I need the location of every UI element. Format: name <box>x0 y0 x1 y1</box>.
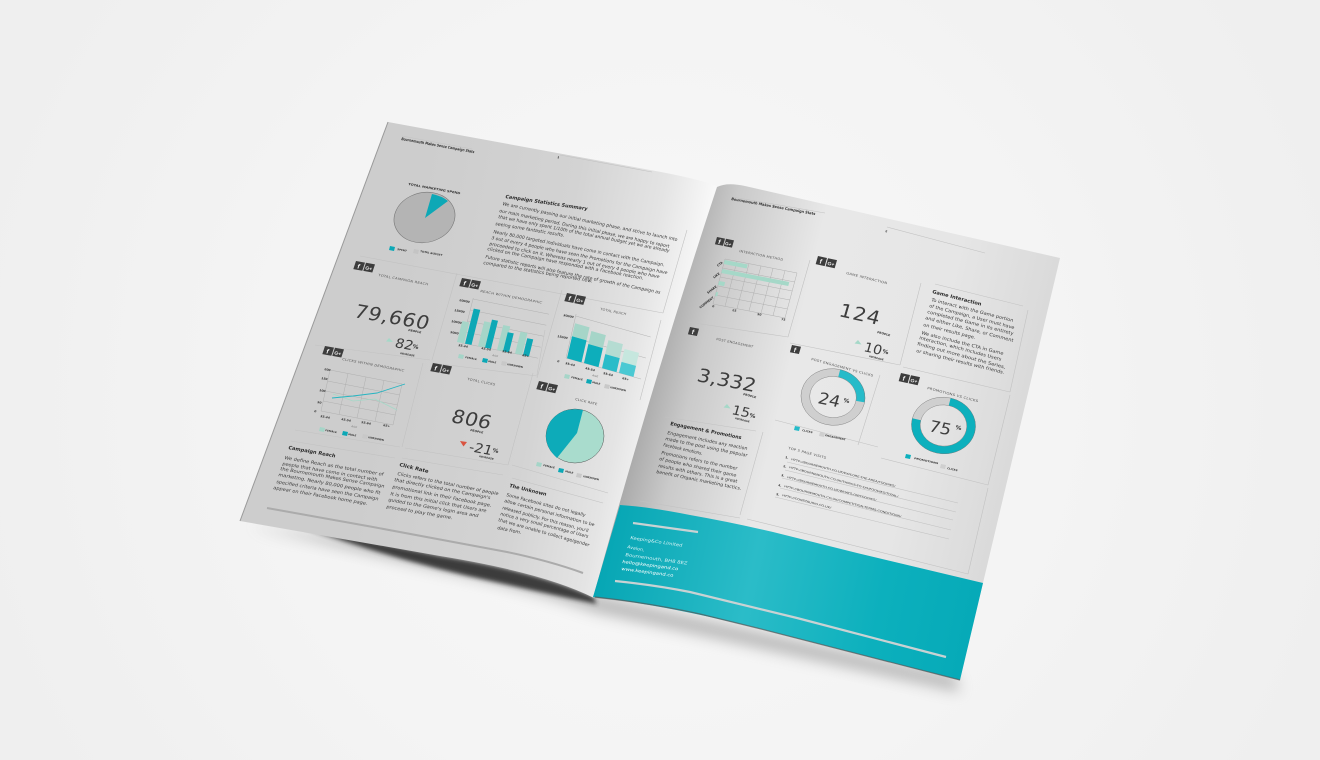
panel: reach within demographic: 45-54 <box>481 346 491 352</box>
text block: engagement and promotions: made to the post using the popular <box>664 436 748 459</box>
list: top 5 page visits: 1. <box>785 455 789 460</box>
list: top 5 page visits: HTTP://BOURNEMOUTH.CO.UK/WHATS-ON/FOODIES/ <box>787 475 877 502</box>
panel: clicks within demographic: 50 <box>317 400 322 405</box>
panel: total clicks: 806 <box>448 406 494 434</box>
panel: clicks within demographic: UNKNOWN <box>368 435 385 442</box>
page header left <box>401 136 652 172</box>
text block: campaign statistics summary: Nearly 80,000 targeted individuals have come in contact with the Campaign. <box>492 229 665 268</box>
text block: campaign reach: marketing. Nearly 80,000 people who fit <box>277 472 381 496</box>
panel: promotions vs clicks: CLICKS <box>947 466 958 472</box>
panel: total clicks <box>430 363 499 461</box>
page header right <box>731 196 985 253</box>
text block: the unknown: notice a very small percentage of Users <box>499 511 590 540</box>
teal footer band <box>593 505 983 680</box>
bar chart <box>457 297 549 358</box>
footer contact block: hello@keepingand.co <box>621 559 679 572</box>
panel: reach within demographic: 20000 <box>459 298 470 304</box>
right page <box>593 184 1060 680</box>
page header left: 1 <box>557 155 560 159</box>
panel: total clicks: -21 <box>467 440 495 459</box>
text block: engagement and promotions: benefit of Organic marketing tactics. <box>655 469 742 492</box>
footer rule right <box>615 581 946 657</box>
icon: social tags: G+ <box>910 378 918 385</box>
icon: social tags: f <box>462 281 467 288</box>
panel: post engagement: PEOPLE <box>743 392 757 399</box>
panel: game interaction <box>816 256 891 362</box>
panel: total campaign reach <box>351 261 432 358</box>
panel: total reach: 35-44 <box>565 361 575 367</box>
text block: click rate: guided to the Game's login area and <box>387 497 479 519</box>
panel: total reach <box>557 293 651 392</box>
text block: campaign reach: the Bournemouth Makes Sense Campaign <box>279 466 385 490</box>
icon: social tags <box>459 278 481 290</box>
panel: game interaction: 124 <box>837 299 883 329</box>
panel: total reach: 0 <box>557 359 560 363</box>
icon: social tags: f <box>902 376 906 383</box>
panel: total clicks: PEOPLE <box>470 428 484 434</box>
text block: campaign reach: specified criteria have seen the Campaign <box>275 479 379 502</box>
left page <box>240 122 717 598</box>
panel: clicks within demographic: 100 <box>319 388 326 393</box>
panel: total clicks: INCREASE <box>479 454 495 461</box>
panel: total clicks: % <box>491 448 499 455</box>
icon: social tags: f <box>567 296 572 303</box>
icon: social tags: G+ <box>575 298 584 305</box>
panel: post engagement vs clicks: % <box>842 398 850 405</box>
icon: social tags: f <box>717 239 722 246</box>
panel: click rate <box>536 381 604 481</box>
panel: interaction method: 0 <box>712 304 715 308</box>
text block: the unknown: Some Facebook sites do not legally <box>505 492 586 518</box>
text block: the unknown: data from. <box>496 525 522 536</box>
panel: game interaction: PEOPLE <box>877 330 891 337</box>
text block: campaign statistics summary <box>482 194 678 296</box>
left page edge <box>240 122 388 521</box>
right page content <box>615 196 1028 657</box>
line chart <box>321 370 405 425</box>
panel: post engagement vs clicks: 24 <box>816 389 843 411</box>
panel: clicks within demographic: FEMALE <box>325 428 338 434</box>
panel: total campaign reach: 79,660 <box>351 301 432 334</box>
text block: game interaction: of the Campaign, a User must have <box>928 303 1015 331</box>
footer contact block: Keeping&Co Limited <box>629 535 683 549</box>
page header right: Bournemouth Makes Sense Campaign Stats <box>731 196 817 216</box>
panel: click rate: CLICK RATE <box>575 397 598 406</box>
icon: social tags: G+ <box>725 241 732 247</box>
footer rule left <box>267 508 583 573</box>
panel: interaction method: SHARE <box>706 285 718 295</box>
text block: campaign statistics summary: 3 out of every 4 people who have seen the Promotions for the Campaign have <box>490 235 668 276</box>
icon: facebook tag: f <box>691 329 696 336</box>
text block: campaign statistics summary: seeing some fantastic results. <box>494 221 565 239</box>
panel: reach within demographic: 15000 <box>454 308 465 314</box>
panel: total reach: UNKNOWN <box>610 385 627 392</box>
text block: campaign statistics summary: compared to the statistics being reported now. <box>482 260 593 284</box>
text block: click rate: Click Rate <box>398 462 430 475</box>
list: top 5 page visits: HTTP://BOURNEMOUTH.CO.UK/EXPLORE-THE-AREA/FOODIES/ <box>791 457 896 488</box>
panel: clicks within demographic: 45-54 <box>341 417 351 423</box>
panel: reach within demographic: UNKNOWN <box>507 362 524 369</box>
text block: engagement and promotions: Engagement includes any reaction <box>666 430 748 452</box>
panel: total marketing spend: TOTAL MARKETING SPEND <box>408 182 461 195</box>
text block: click rate: that directly clicked on the Campaign's <box>393 477 492 501</box>
list: top 5 page visits: HTTP://BOURNEMOUTH.CO.UK/COMPETITION-TERMS-CONDITIONS/ <box>784 484 902 518</box>
text block: game interaction: or sharing their results with friends. <box>915 348 1005 376</box>
panel: total reach: 45-54 <box>585 366 595 372</box>
panel: total clicks: TOTAL CLICKS <box>466 377 496 387</box>
text block: engagement and promotions: Engagement & Promotions <box>669 421 742 441</box>
text block: engagement and promotions <box>655 417 756 492</box>
text block: game interaction: Game Interaction <box>931 289 982 308</box>
panel: reach within demographic: 10000 <box>451 319 462 325</box>
footer contact block <box>620 523 698 579</box>
text block: engagement and promotions: results with others. This is a great <box>657 463 738 485</box>
icon: social tags <box>536 381 558 394</box>
panel: interaction method: COMMENT <box>698 295 715 309</box>
icon: facebook tag: f <box>793 347 798 354</box>
panel: reach within demographic: 35-44 <box>458 343 468 349</box>
panel: promotions vs clicks: PROMOTIONS VS CLICKS <box>927 386 979 403</box>
icon: social tags <box>715 237 734 249</box>
text block: the unknown: The Unknown <box>508 483 548 498</box>
panel: post engagement: 3,332 <box>695 364 759 397</box>
panel: game interaction: INCREASE <box>869 354 884 362</box>
dividers right <box>640 260 1028 574</box>
left page content <box>267 136 687 573</box>
icon: social tags <box>430 363 452 375</box>
text block: campaign reach: people that have come in contact with <box>281 461 378 483</box>
list: top 5 page visits: HTTP://BOURNEMOUTH.CO.UK/THINGS-TO-DO/FOODIES/TOTAL/ <box>789 465 899 498</box>
panel: total marketing spend: SPENT <box>397 247 408 253</box>
panel: total reach: 65+ <box>622 376 630 382</box>
panel: click rate: FEMALE <box>543 463 556 469</box>
panel: post engagement vs clicks: POST ENGAGEMENT VS CLICKS <box>811 357 874 378</box>
panel: total campaign reach: 82 <box>393 336 415 354</box>
text block: the unknown: that we are unable to collect age/gender <box>497 517 590 548</box>
icon: social tags: G+ <box>470 283 479 289</box>
list: top 5 page visits: TOP 5 PAGE VISITS <box>787 446 827 460</box>
text block: game interaction: and either Like, Share, or Comment <box>924 315 1014 344</box>
stacked bar chart <box>566 314 651 379</box>
text block: campaign reach: Campaign Reach <box>287 445 337 459</box>
list: top 5 page visits: 3. <box>781 473 785 478</box>
panel: reach within demographic: MALE <box>488 359 497 364</box>
panel: clicks within demographic: MALE <box>348 432 357 437</box>
text block: campaign statistics summary: Future statistic reports will also feature the rate of growth of the Campaign as <box>484 254 662 296</box>
panel: total campaign reach: PEOPLE <box>408 328 422 334</box>
list: top 5 page visits: 5. <box>776 492 780 497</box>
text block: campaign statistics summary: Campaign Statistics Summary <box>504 194 589 212</box>
text block: campaign statistics summary: We are currently passing our initial marketing phase, and strive to launch into <box>501 201 678 243</box>
footer contact block: Bournemouth, BH8 8EZ <box>624 552 688 567</box>
icon: social tags: f <box>433 366 438 373</box>
text block: engagement and promotions: Facebook emotions. <box>662 442 703 457</box>
icon: social tags <box>353 261 375 273</box>
panel: reach within demographic: 65+ <box>522 353 530 358</box>
page header left: Bournemouth Makes Sense Campaign Stats <box>401 136 476 154</box>
horizontal bar chart <box>713 259 797 318</box>
list: top 5 page visits: HTTP://CONSTAURIO.CO.UK/ <box>782 493 832 510</box>
panel: total campaign reach: % <box>411 344 419 351</box>
panel: post engagement <box>688 327 759 424</box>
text block: click rate: It is from this initial click that Users are <box>389 491 487 514</box>
text block: campaign reach: We define Reach as the total number of <box>283 455 385 478</box>
panel: total reach: 15000 <box>557 334 568 340</box>
text block: click rate: proceed to play the game. <box>385 504 453 521</box>
icon: social tags <box>322 346 344 358</box>
panel: click rate: MALE <box>565 469 574 475</box>
panel: game interaction: 10 <box>862 340 884 359</box>
panel: total marketing spend: TOTAL BUDGET <box>420 249 443 257</box>
footer contact block: www.keepingand.co <box>620 566 674 579</box>
panel: reach within demographic: REACH WITHIN DEMOGRAPHIC <box>480 289 543 305</box>
panel: total reach: MALE <box>592 380 601 386</box>
panel: interaction method: 50 <box>757 312 762 317</box>
panel: clicks within demographic: 150 <box>321 376 328 381</box>
panel: total reach: 30000 <box>563 313 574 319</box>
panel: clicks within demographic: 200 <box>324 367 331 372</box>
text block: campaign reach: appear on their Facebook home page. <box>272 485 368 507</box>
icon: social tags: G+ <box>547 386 556 393</box>
icon: social tags: f <box>819 259 823 266</box>
icon: social tags: G+ <box>441 368 450 374</box>
panel: reach within demographic <box>450 278 549 369</box>
text block: campaign statistics summary: proceeded to click on it. Whereas nearly 1 out of every 4 people who have <box>488 241 660 280</box>
panel: interaction method: 75 <box>781 317 786 322</box>
panel: post engagement vs clicks: CLICKS <box>802 428 813 434</box>
dark shadow under left page <box>300 526 597 604</box>
panel: reach within demographic: 5000 <box>450 330 459 335</box>
text block: the unknown: allow certain personal information to be <box>503 498 595 528</box>
panel: interaction method: INTERACTION METHOD <box>739 249 784 262</box>
panel: clicks within demographic: 0 <box>314 409 317 413</box>
panel: total reach: AGE <box>592 373 599 378</box>
panel: reach within demographic: AGE <box>492 353 499 358</box>
panel: total campaign reach: TOTAL CAMPAIGN REACH <box>377 273 429 286</box>
text block: game interaction <box>915 284 1023 376</box>
text block: the unknown <box>496 478 603 548</box>
panel: total reach: TOTAL REACH <box>599 307 627 316</box>
page header right: 2 <box>885 229 888 233</box>
text block: campaign statistics summary: our main marketing period. During this initial phase, we are happy to report <box>498 208 670 250</box>
panel: total reach: FEMALE <box>571 375 584 381</box>
donut chart <box>795 363 871 431</box>
icon: social tags <box>816 256 837 269</box>
icon: social tags: f <box>539 384 544 391</box>
icon: social tags: G+ <box>364 266 373 272</box>
text block: campaign statistics summary: clicked on the Campaign have responded with a Facebook reaction. <box>486 246 644 281</box>
text block: game interaction: To interact with the Game portion <box>929 297 1014 324</box>
panel: post engagement: INCREASE <box>735 416 750 424</box>
panel: clicks within demographic: 55-64 <box>361 420 371 426</box>
panel: post engagement vs clicks: ENGAGEMENT <box>825 433 846 441</box>
soft shadow under brochure <box>250 526 960 692</box>
text block: game interaction: completed the Game in its entirety <box>926 309 1014 337</box>
panel: clicks within demographic: 35-44 <box>320 414 330 420</box>
dividers left <box>295 230 687 493</box>
text block: the unknown: released publicly. For this reason, you'll <box>501 505 589 534</box>
text block: engagement and promotions: Promotions refers to the number <box>660 450 738 472</box>
list: top 5 page visits: 2. <box>783 464 787 469</box>
icon: social tags: G+ <box>333 351 342 357</box>
pie chart <box>546 409 604 463</box>
panel: interaction method: LIKE <box>712 272 721 279</box>
panel: promotions vs clicks <box>899 373 982 472</box>
panel: promotions vs clicks: % <box>954 425 962 432</box>
text block: click rate: promotional link in their Facebook page. <box>391 484 492 509</box>
dark edge under right page <box>595 597 960 680</box>
panel: interaction method: 25 <box>732 308 737 313</box>
text block: game interaction: finding out more about the Series, <box>916 341 1007 371</box>
icon: social tags <box>564 293 586 305</box>
text block: campaign statistics summary: that we have only spent 1/10th of the total annual budget yet we are already <box>497 214 670 254</box>
panel: promotions vs clicks: PROMOTIONS <box>914 456 939 465</box>
panel: post engagement vs clicks <box>790 345 874 441</box>
panel: clicks within demographic: AGE <box>351 424 358 429</box>
panel: game interaction: % <box>881 349 889 356</box>
text block: click rate: Clicks refers to the total number of people <box>396 471 499 497</box>
icon: social tags <box>899 373 920 386</box>
text block: click rate <box>385 458 503 521</box>
icon: social tags: f <box>356 264 361 271</box>
panel: total reach: 55-64 <box>603 371 613 377</box>
panel: click rate: UNKNOWN <box>583 474 600 481</box>
panel: reach within demographic: FEMALE <box>465 355 478 361</box>
list: top 5 page visits <box>775 446 958 539</box>
text block: campaign reach <box>272 441 395 507</box>
panel: post engagement: POST ENGAGEMENT <box>716 337 755 349</box>
panel: total campaign reach: INCREASE <box>400 351 416 358</box>
list: top 5 page visits: 4. <box>778 483 782 488</box>
panel: game interaction: GAME INTERACTION <box>846 271 888 285</box>
panel: interaction method <box>698 237 797 322</box>
text block: engagement and promotions: of people who shared their game <box>658 456 737 479</box>
panel: reach within demographic: 55-64 <box>502 349 512 355</box>
icon: social tags: f <box>325 349 330 356</box>
panel: promotions vs clicks: 75 <box>927 417 954 439</box>
footer contact block: Avalon, <box>626 544 645 553</box>
panel: clicks within demographic <box>314 346 405 442</box>
panel: clicks within demographic: CLICKS WITHIN DEMOGRAPHIC <box>342 357 405 373</box>
icon: social tags: G+ <box>827 261 835 268</box>
donut chart <box>905 391 982 460</box>
panel: post engagement: 15 <box>730 403 752 421</box>
text block: game interaction: We also include the CTA in Game <box>920 330 1004 357</box>
text block: game interaction: on their results page. <box>922 322 976 341</box>
text block: game interaction: interaction, which includes Users <box>918 335 1003 363</box>
panel: total marketing spend <box>386 182 463 257</box>
panel: post engagement: % <box>748 413 756 420</box>
panel: interaction method: CTA <box>716 260 724 268</box>
panel: clicks within demographic: 65+ <box>383 423 391 428</box>
